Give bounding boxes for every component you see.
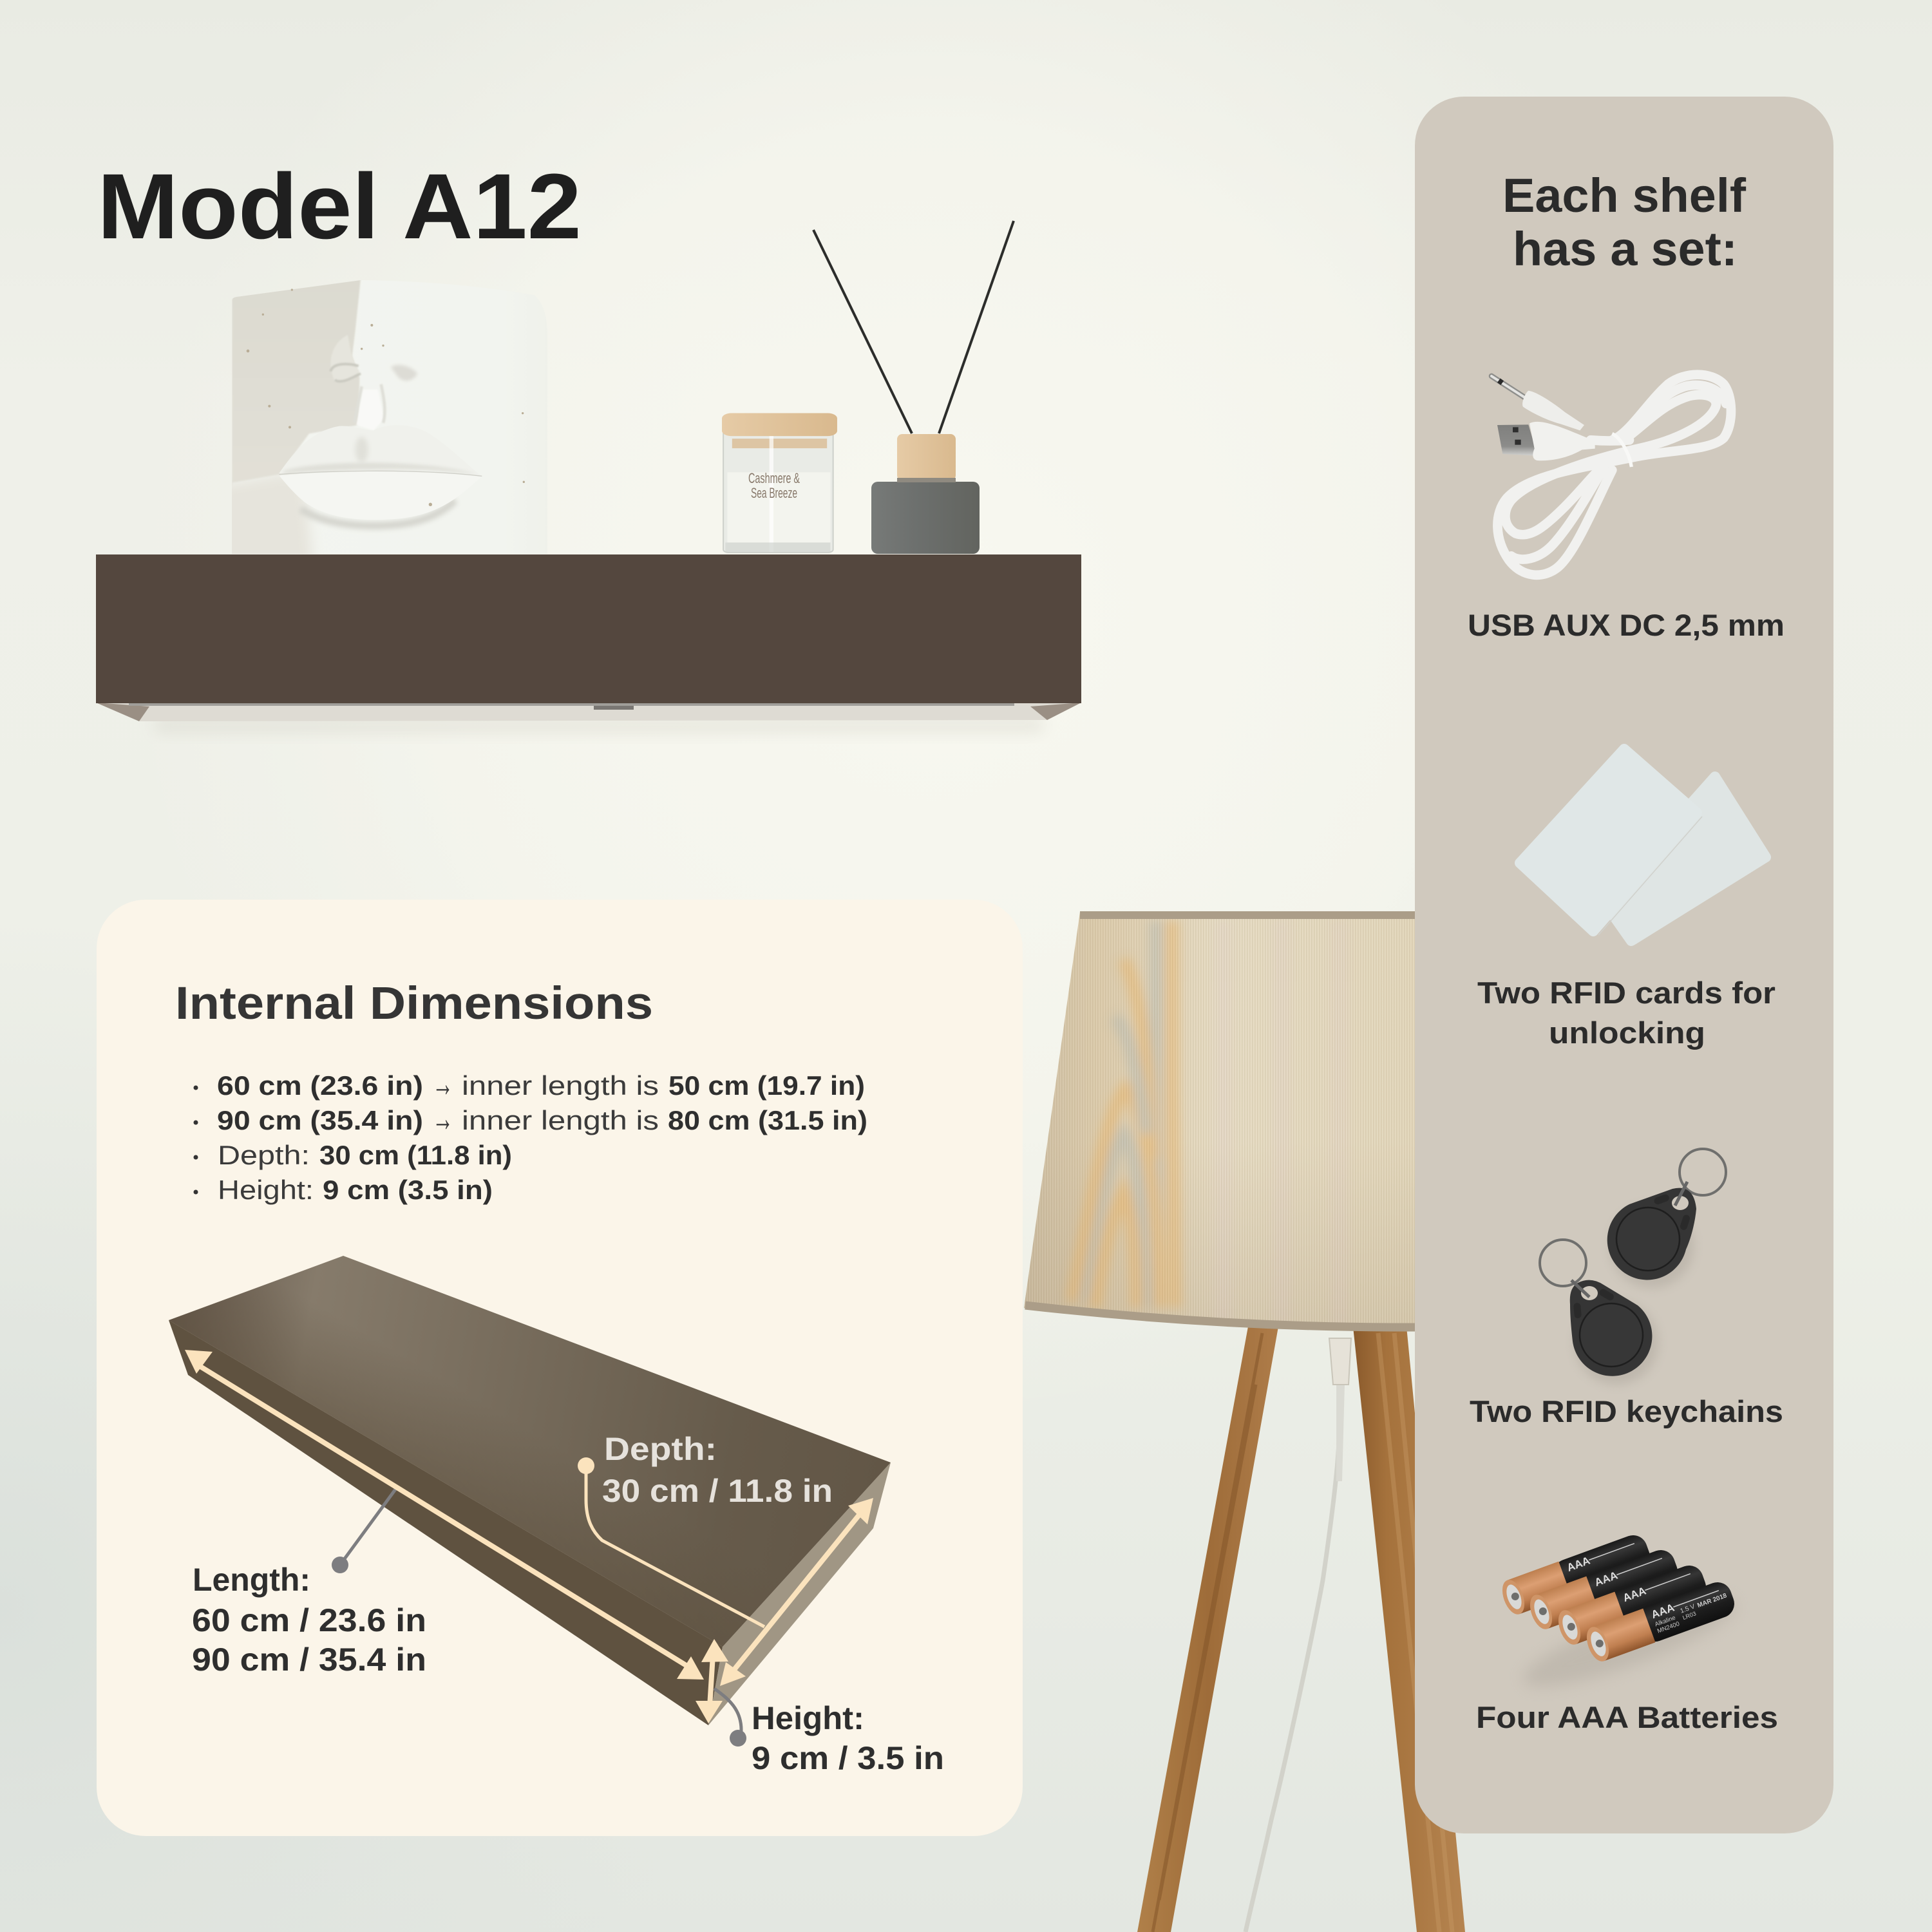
height label: Height: <box>752 1700 864 1736</box>
label: aaa batteries: Four AAA Batteries <box>1476 1700 1778 1734</box>
title: Model A12 <box>97 155 582 258</box>
shelf underside <box>96 703 1081 721</box>
heading: internal dimensions: Internal Dimensions <box>175 978 653 1029</box>
shelf front <box>96 554 1081 703</box>
dimension list: → <box>432 1063 453 1104</box>
icon: rfid cards <box>1520 749 1766 941</box>
icon: aaa batteries <box>1498 1531 1743 1703</box>
dimension list: inner length is <box>462 1070 659 1101</box>
shelf with decor <box>96 221 1081 732</box>
icon: rfid keychains <box>1540 1149 1726 1385</box>
icon: usb cable <box>1492 375 1731 575</box>
icon: aaa batteries: MN2400 <box>1656 1620 1681 1635</box>
height leader <box>714 1689 746 1747</box>
dimension list <box>193 1063 867 1205</box>
length label <box>192 1562 426 1678</box>
lamp legs <box>1137 1327 1465 1932</box>
lower key fob <box>1570 1280 1652 1376</box>
jack plug <box>1492 376 1526 398</box>
wall shadow under shelf <box>155 718 1043 732</box>
lips <box>279 425 482 520</box>
floor lamp <box>1024 912 1465 1932</box>
candle label: Sea Breeze <box>751 485 797 501</box>
dimension list: 9 cm (3.5 in) <box>323 1175 493 1205</box>
panel heading: Each shelf <box>1502 169 1746 222</box>
depth label: 30 cm / 11.8 in <box>602 1473 833 1509</box>
dimension list: 80 cm (31.5 in) <box>668 1105 867 1135</box>
panel heading: has a set: <box>1513 222 1738 276</box>
icon: aaa batteries: AAA <box>1649 1602 1676 1621</box>
icon: aaa batteries: AAA <box>1621 1585 1648 1604</box>
dimension list: 60 cm (23.6 in) <box>217 1070 423 1101</box>
length label: Length: <box>193 1562 310 1598</box>
label: rfid cards <box>1477 976 1776 1050</box>
dimension list: 50 cm (19.7 in) <box>668 1070 865 1101</box>
dimension list: → <box>432 1097 453 1139</box>
concrete face vase <box>232 280 525 554</box>
candle label <box>748 470 800 501</box>
candle label: Cashmere & <box>748 470 800 486</box>
concrete specks <box>247 289 525 506</box>
panel: internal dimensions <box>97 900 1023 1836</box>
shelf diagram <box>169 1256 944 1776</box>
lamp cord <box>1245 1338 1351 1932</box>
length label: 90 cm / 35.4 in <box>192 1642 426 1678</box>
depth label <box>602 1431 833 1509</box>
dimension list: inner length is <box>462 1105 659 1135</box>
key rings <box>1680 1149 1726 1195</box>
label: rfid cards: unlocking <box>1549 1016 1705 1050</box>
icon: aaa batteries: LR03 <box>1681 1610 1697 1621</box>
icon: aaa batteries: AAA <box>1593 1569 1620 1589</box>
cable tie <box>1612 433 1631 467</box>
shelf front face <box>169 1320 723 1725</box>
icon: aaa batteries: MAR 2018 <box>1696 1592 1728 1609</box>
cable loops <box>1497 375 1731 575</box>
height label: 9 cm / 3.5 in <box>752 1740 944 1776</box>
icon: aaa batteries: Alkaline <box>1654 1615 1676 1628</box>
dimension list: 30 cm (11.8 in) <box>319 1140 512 1170</box>
panel heading <box>1502 169 1746 276</box>
length leader <box>332 1488 397 1573</box>
depth arrow <box>720 1498 873 1686</box>
depth label: Depth: <box>604 1431 717 1467</box>
depth leader <box>578 1457 764 1627</box>
nose <box>330 335 417 430</box>
dimension list: 90 cm (35.4 in) <box>217 1105 423 1135</box>
upper key fob <box>1607 1188 1696 1280</box>
usb plug <box>1497 424 1535 455</box>
lamp shade <box>1024 912 1417 1337</box>
dimension list: Depth: <box>218 1140 310 1170</box>
label: usb cable: USB AUX DC 2,5 mm <box>1468 608 1785 642</box>
icon: aaa batteries: AAA <box>1565 1555 1592 1574</box>
label: rfid keychains: Two RFID keychains <box>1470 1394 1783 1428</box>
shelf side face <box>708 1463 891 1725</box>
reed diffuser <box>813 221 1014 554</box>
height label <box>752 1700 944 1776</box>
candle jar <box>722 413 837 553</box>
length arrow <box>185 1350 704 1680</box>
length label: 60 cm / 23.6 in <box>192 1602 426 1638</box>
panel: each shelf has a set <box>1415 97 1833 1833</box>
icon: aaa batteries: 1.5 V <box>1680 1603 1696 1615</box>
shelf top face <box>169 1256 891 1647</box>
height arrow <box>696 1639 728 1723</box>
dimension list: Height: <box>218 1175 314 1205</box>
label: rfid cards: Two RFID cards for <box>1477 976 1776 1010</box>
